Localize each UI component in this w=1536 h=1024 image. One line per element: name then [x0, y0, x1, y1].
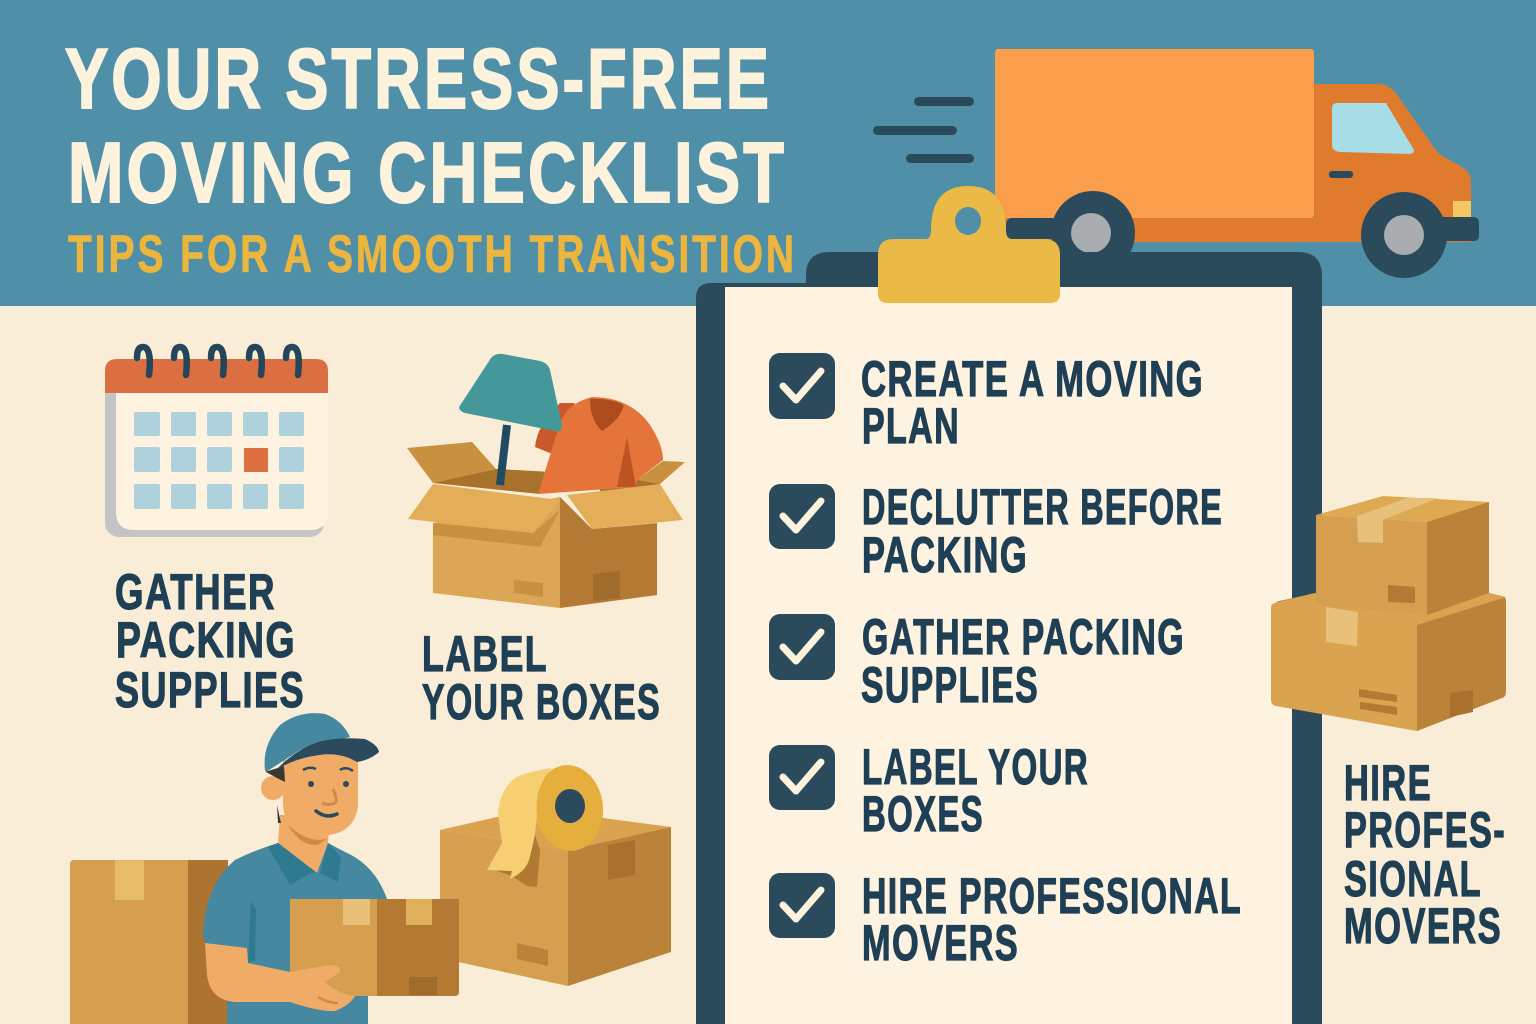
label: gather packing supplies: PACKING [116, 612, 296, 668]
label: label your boxes [422, 626, 661, 730]
icon: calendar [105, 347, 328, 537]
label: gather packing supplies: GATHER [115, 564, 276, 620]
checklist item 5 [769, 868, 1242, 971]
checklist item 3: SUPPLIES [861, 657, 1039, 713]
box held by mover [290, 899, 377, 996]
mover sleeve fold [248, 901, 256, 963]
header band [0, 0, 1536, 306]
mover face details [303, 768, 353, 816]
label: label your boxes: YOUR BOXES [422, 674, 661, 730]
icon: clipboard clip [878, 186, 1060, 303]
label: label your boxes: LABEL [422, 626, 548, 682]
checklist item 5: MOVERS [862, 915, 1019, 971]
title [65, 32, 787, 221]
label: hire professional movers [1344, 755, 1506, 954]
icon: stacked boxes [1271, 496, 1506, 731]
title: MOVING CHECKLIST [68, 126, 787, 221]
checklist item 2: DECLUTTER BEFORE [862, 479, 1223, 535]
subtitle: TIPS FOR A SMOOTH TRANSITION [68, 225, 797, 284]
mover head [283, 750, 358, 836]
page background [0, 306, 1536, 1024]
checklist item 3 [769, 609, 1185, 713]
icon: open box with lamp and shirt [407, 354, 685, 608]
panel: clipboard [696, 186, 1322, 1024]
icon: box behind mover [70, 860, 228, 1024]
checklist item 1: CREATE A MOVING [861, 351, 1204, 407]
mover collar [268, 843, 341, 885]
mover shirt [203, 843, 387, 1024]
checklist item 3: GATHER PACKING [862, 609, 1185, 665]
label: gather packing supplies: SUPPLIES [115, 662, 305, 718]
icon: moving truck [995, 49, 1479, 278]
checklist item 4 [769, 739, 1089, 842]
checklist item 5: HIRE PROFESSIONAL [862, 868, 1242, 924]
checklist item 1: PLAN [862, 398, 960, 454]
icon: mover holding box [203, 713, 459, 1024]
mover arm and hand [205, 943, 355, 1011]
title: YOUR STRESS-FREE [65, 32, 772, 127]
icon: speed lines [873, 97, 974, 163]
checklist item 2 [769, 479, 1223, 583]
label: hire professional movers: HIRE [1344, 755, 1432, 811]
mover neck [278, 815, 330, 873]
checklist item 1 [769, 351, 1204, 454]
checklist item 4: LABEL YOUR [862, 739, 1089, 795]
mover cap [265, 713, 350, 772]
label: gather packing supplies [115, 564, 305, 718]
icon: box with tape roll [440, 762, 671, 986]
checklist item 4: BOXES [862, 786, 984, 842]
checklist item 2: PACKING [862, 527, 1028, 583]
mover finger line [318, 997, 338, 1003]
